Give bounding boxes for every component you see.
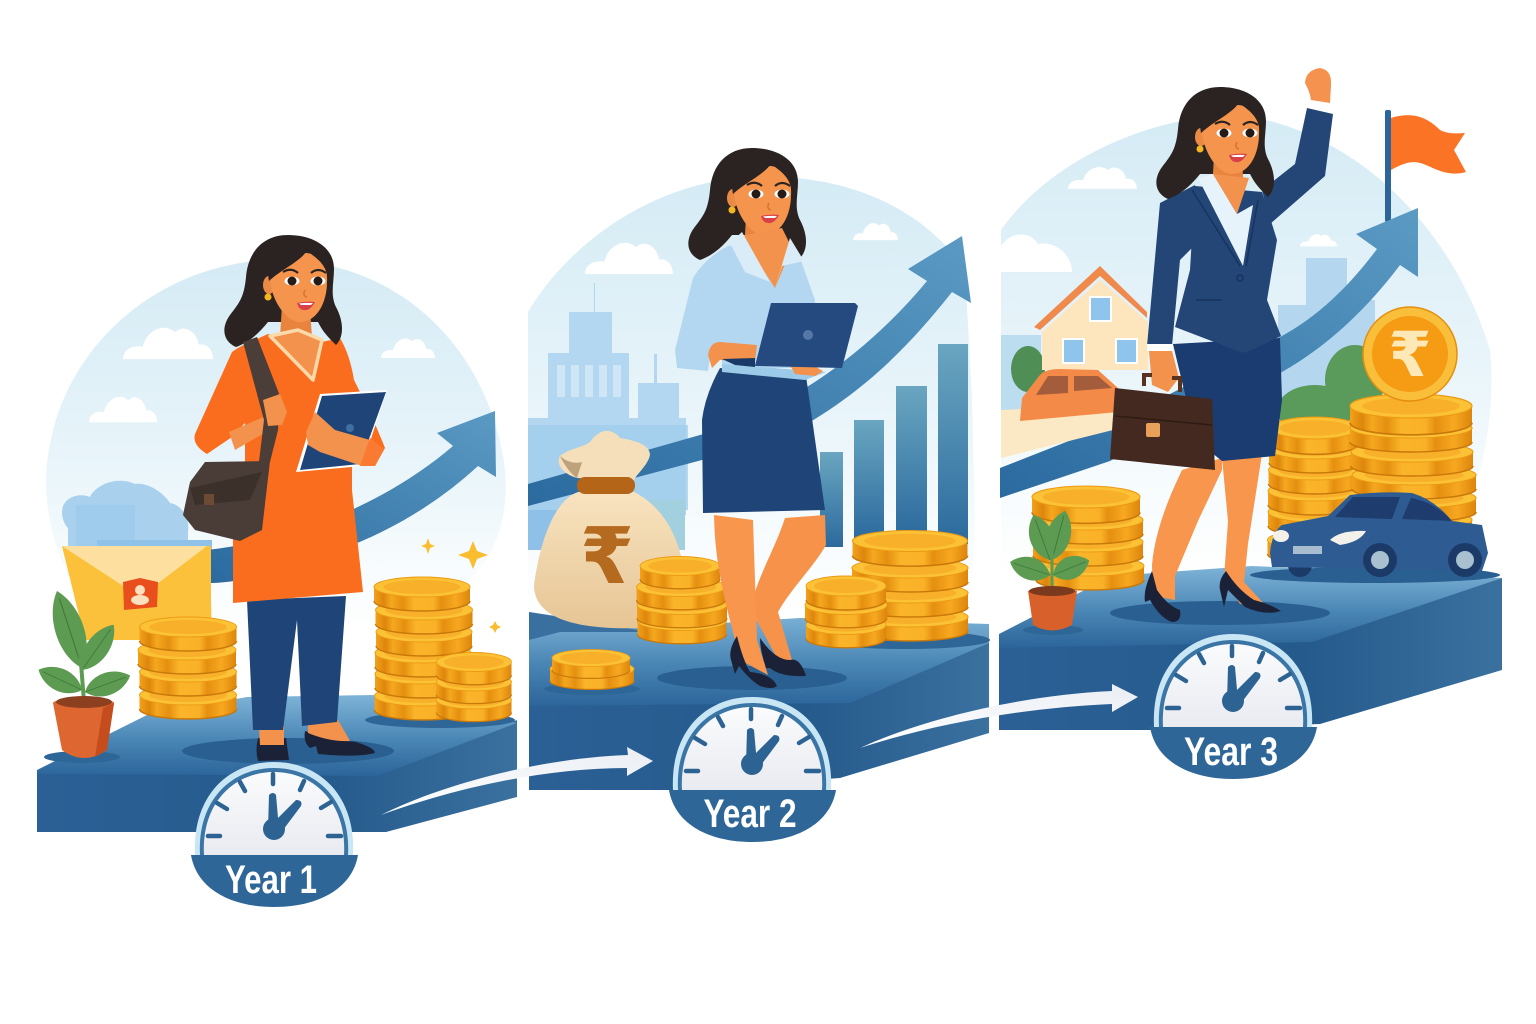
right leg bbox=[752, 515, 826, 660]
left shoe bbox=[1145, 571, 1180, 622]
orange car bbox=[1020, 369, 1118, 421]
collar bbox=[730, 232, 804, 288]
money bag bbox=[534, 431, 682, 628]
sky circle year 1 bbox=[46, 260, 506, 640]
right shoe bbox=[1220, 571, 1281, 613]
fist bbox=[1305, 68, 1331, 103]
briefcase bbox=[1110, 375, 1215, 470]
blue background cloud and buildings bbox=[62, 481, 212, 552]
clouds year 1 bbox=[89, 328, 435, 422]
laptop bbox=[722, 303, 858, 368]
raised arm bbox=[1262, 108, 1333, 224]
background buildings left bbox=[1001, 335, 1041, 410]
arrow: year 1 to year 2 bbox=[381, 747, 653, 815]
waist band bbox=[722, 364, 826, 380]
panel: Year 1 bbox=[34, 235, 517, 907]
coin stack middle year 3 bbox=[1268, 417, 1362, 564]
left sleeve bbox=[194, 340, 270, 454]
skirt bbox=[1173, 338, 1282, 461]
sky year 2 bbox=[528, 177, 975, 620]
sparkles bbox=[421, 538, 501, 633]
arrow: year 2 to year 3 bbox=[860, 684, 1138, 748]
cuff and hand bbox=[1147, 344, 1179, 392]
bushes behind coins bbox=[1277, 345, 1385, 435]
left leg bbox=[714, 515, 768, 675]
coin stacks right year 2 bbox=[805, 530, 990, 649]
head bbox=[224, 235, 342, 353]
jacket torso bbox=[1175, 186, 1281, 353]
trousers bbox=[247, 596, 346, 730]
left shoe bbox=[730, 636, 777, 688]
plant year 3 bbox=[1007, 508, 1093, 635]
neckline bbox=[270, 330, 322, 380]
woman year 1 bbox=[182, 235, 394, 764]
clock year 2 bbox=[669, 697, 836, 842]
neck opening bbox=[741, 228, 792, 288]
neck opening bbox=[1213, 174, 1249, 214]
feet bbox=[259, 720, 350, 745]
clock year 3 bbox=[1150, 634, 1317, 779]
platform year 2 bbox=[529, 612, 989, 790]
handbag bbox=[183, 461, 270, 541]
sky year 3 bbox=[1001, 115, 1492, 580]
panel: Year 2 bbox=[528, 148, 990, 842]
woman year 3 bbox=[1110, 68, 1333, 625]
head bbox=[688, 148, 806, 266]
clouds year 3 bbox=[1001, 167, 1337, 272]
city skyline year 3 bbox=[1278, 258, 1375, 400]
house bbox=[1034, 266, 1148, 370]
shadow bbox=[182, 738, 394, 764]
right leg bbox=[1222, 454, 1266, 606]
clock year 1 bbox=[191, 762, 358, 907]
label year 3: Year 3 bbox=[1184, 730, 1278, 774]
clouds year 2 bbox=[585, 223, 898, 274]
blouse bbox=[675, 240, 815, 371]
blue car bbox=[1250, 492, 1500, 583]
label year 1: Year 1 bbox=[225, 858, 317, 902]
coin stack left year 3 bbox=[1032, 486, 1144, 590]
jacket left arm bbox=[1147, 185, 1200, 346]
money bag: ₹ bbox=[580, 512, 634, 600]
flag bbox=[1385, 110, 1466, 222]
lapel lines and button bbox=[1192, 190, 1258, 300]
envelope bbox=[62, 546, 212, 640]
shadow bbox=[1110, 601, 1330, 625]
hand on strap bbox=[263, 394, 287, 426]
coin stack right year 1 bbox=[365, 577, 515, 728]
platform year 1 bbox=[37, 695, 517, 832]
large rupee coin: ₹ bbox=[1388, 321, 1432, 390]
platform year 3 bbox=[999, 566, 1502, 730]
plant year 1 bbox=[34, 587, 134, 763]
coin stack right year 3 bbox=[1350, 394, 1476, 544]
book bbox=[296, 390, 387, 472]
strap bbox=[243, 337, 280, 470]
coin stack by bag bbox=[636, 556, 727, 644]
panel: Year 3 bbox=[999, 68, 1502, 779]
growth arrow year 2 bbox=[528, 236, 971, 506]
hands bbox=[708, 342, 823, 376]
left forearm bbox=[229, 415, 278, 450]
shoes bbox=[256, 731, 375, 761]
bush left bbox=[1011, 346, 1045, 392]
shadow bbox=[657, 666, 847, 690]
woman year 2 bbox=[657, 148, 858, 690]
small coin stack year 2 bbox=[544, 650, 640, 695]
label year 2: Year 2 bbox=[704, 792, 796, 836]
city skyline year 2 bbox=[528, 283, 688, 550]
coin stack left year 1 bbox=[138, 617, 236, 719]
growth arrow year 3 bbox=[1000, 208, 1418, 498]
bar chart year 2 bbox=[820, 344, 968, 547]
growth arrow year 1 bbox=[207, 411, 496, 583]
skirt bbox=[702, 368, 825, 513]
large rupee coin bbox=[1363, 307, 1457, 401]
right forearm and hand bbox=[306, 412, 384, 466]
road bbox=[1001, 405, 1113, 458]
shirt bbox=[1198, 174, 1253, 266]
right shoe bbox=[760, 638, 806, 676]
kurta bbox=[233, 334, 385, 603]
head bbox=[1156, 87, 1274, 205]
left leg bbox=[1152, 458, 1222, 600]
